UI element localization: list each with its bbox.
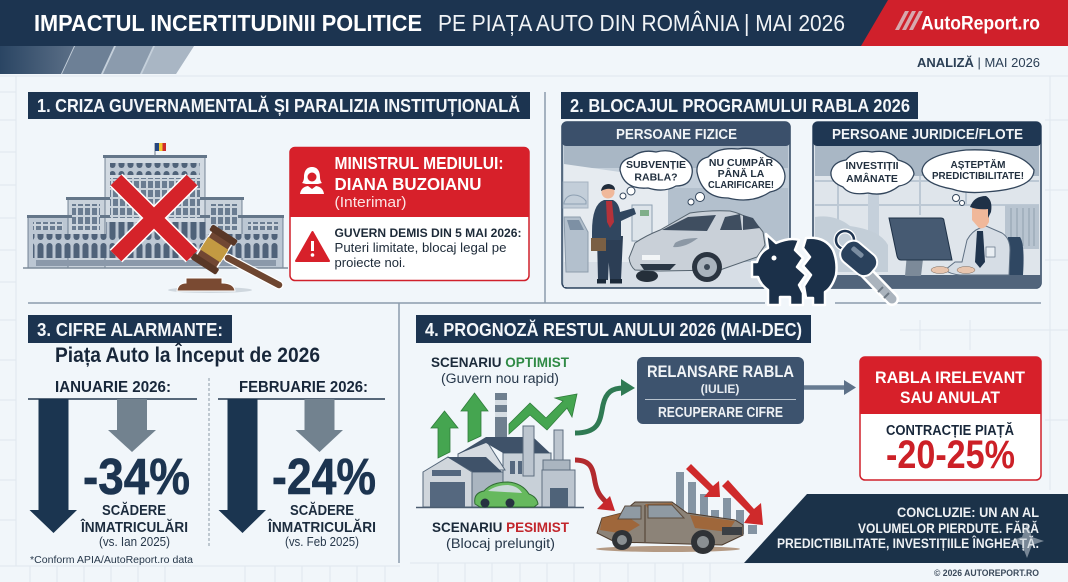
footer copyright: © 2026 AUTOREPORT.RO (934, 568, 1039, 579)
caption: SCĂDERE (102, 502, 166, 519)
source note: *Conform APIA/AutoReport.ro data (30, 555, 193, 566)
caption (267, 502, 376, 549)
subtitle: Piața Auto la Început de 2026 (55, 343, 320, 367)
card heading: (Interimar) (334, 194, 407, 211)
box: relansare rabla: RELANSARE RABLA (647, 363, 794, 381)
heading 4 (416, 315, 811, 343)
icon: desk (813, 275, 1041, 288)
thought bubble: asteptam: PREDICTIBILITATE! (932, 171, 1024, 182)
thought bubble: nu cumpar: NU CUMPĂR (709, 156, 773, 169)
thought bubble: investitii: AMÂNATE (846, 172, 898, 185)
panel 3: cifre alarmante (28, 315, 385, 566)
logo block: AutoReport.ro (921, 14, 1040, 34)
caption: (vs. Feb 2025) (285, 535, 359, 549)
card body text: proiecte noi. (334, 256, 406, 270)
heading 1: 1. CRIZA GUVERNAMENTALĂ ȘI PARALIZIA INSTITUȚIONALĂ (37, 95, 520, 116)
header stripes (0, 46, 194, 74)
panel 2: blocajul rabla (561, 92, 1041, 305)
conclusion banner: VOLUMELOR PIERDUTE. FĂRĂ (858, 521, 1039, 536)
arrow: red curve (575, 460, 615, 511)
thought bubble: nu cumpar: PÂNĂ LA (718, 167, 765, 180)
icon: customer (591, 184, 636, 284)
card heading: MINISTRUL MEDIULUI: (334, 153, 504, 173)
icon: factory (416, 393, 584, 508)
header bar (0, 0, 1068, 46)
card body text (334, 226, 522, 270)
chart: falling bars (676, 464, 763, 534)
arrow: long down (30, 399, 77, 533)
scene: persoane fizice: PERSOANE FIZICE (616, 127, 737, 143)
card heading (334, 153, 504, 211)
heading 3: 3. CIFRE ALARMANTE: (37, 319, 223, 340)
title: IMPACTUL INCERTITUDINII POLITICE (34, 10, 422, 36)
icon: warning (296, 232, 329, 261)
box: relansare rabla: RECUPERARE CIFRE (658, 405, 783, 421)
arrow: short down (108, 399, 156, 452)
box: rabla irelevant: RABLA IRELEVANT (875, 368, 1026, 387)
label: scenariu pesimist (432, 519, 569, 551)
thought bubble: nu cumpar: CLARIFICARE! (708, 179, 774, 191)
thought bubble: subventie: RABLA? (634, 172, 678, 184)
box: relansare rabla: (IULIE) (701, 382, 739, 396)
thought bubble: asteptam (922, 150, 1034, 206)
heading 3 (28, 315, 232, 343)
label: scenariu pesimist: SCENARIU PESIMIST (432, 519, 569, 535)
scene: persoane juridice (813, 122, 1041, 288)
icon: red X (116, 180, 192, 256)
card heading: DIANA BUZOIANU (334, 174, 482, 194)
arrow: to outcome (804, 380, 856, 395)
box: rabla irelevant: CONTRACȚIE PIAȚĂ (886, 422, 1014, 439)
icon: car (629, 211, 765, 282)
logo block (861, 0, 1068, 46)
panel 1: criza guvernamentala (23, 92, 530, 293)
label: scenariu pesimist: (Blocaj prelungit) (446, 536, 555, 551)
kiosk (564, 217, 588, 272)
arrow: short down (296, 399, 343, 452)
icon: monitor (889, 218, 952, 276)
date label: ANALIZĂ | MAI 2026 (917, 55, 1040, 70)
label: scenariu optimist (431, 354, 569, 386)
panel 4: prognoza (416, 315, 1068, 579)
conclusion banner: CONCLUZIE: UN AN AL (897, 505, 1039, 520)
icon: broken piggy bank (752, 234, 837, 305)
heading 4: 4. PROGNOZĂ RESTUL ANULUI 2026 (MAI-DEC) (425, 319, 802, 340)
caption: (vs. Ian 2025) (99, 535, 170, 549)
label: scenariu optimist: SCENARIU OPTIMIST (431, 354, 569, 370)
conclusion banner (744, 494, 1068, 563)
caption (80, 502, 188, 549)
thought bubble: investitii: INVESTIȚII (845, 160, 899, 172)
thought bubble: investitii (831, 151, 914, 194)
column: ianuarie: IANUARIE 2026: (55, 379, 171, 396)
icon: flag (155, 143, 166, 156)
arrow: green curve (575, 379, 635, 433)
title: PE PIAȚA AUTO DIN ROMÂNIA | MAI 2026 (438, 10, 845, 36)
icon: analyst (931, 196, 1024, 275)
icon: car key (836, 231, 892, 299)
scene: persoane fizice (562, 122, 790, 288)
card: ministru (290, 148, 529, 280)
arrow: long down (218, 399, 266, 533)
caption: ÎNMATRICULĂRI (267, 518, 376, 536)
column: februarie: FEBRUARIE 2026: (239, 379, 368, 396)
box: relansare rabla (637, 357, 804, 424)
heading 2: 2. BLOCAJUL PROGRAMULUI RABLA 2026 (570, 95, 910, 116)
thought bubble: nu cumpar (688, 148, 785, 205)
card body text: Puteri limitate, blocaj legal pe (334, 241, 507, 255)
column: ianuarie (28, 379, 197, 549)
value: -24% (272, 448, 376, 505)
shelf (1005, 205, 1039, 249)
column: februarie (218, 379, 385, 549)
arrows: falling (686, 464, 763, 525)
scene: persoane juridice: PERSOANE JURIDICE/FLOTE (832, 127, 1023, 143)
charger (632, 205, 652, 241)
box: rabla irelevant: -20-25% (886, 433, 1015, 477)
box: rabla irelevant: SAU ANULAT (900, 388, 1001, 407)
caption: SCĂDERE (290, 502, 354, 519)
icon: green car (475, 482, 538, 508)
thought bubble: subventie: SUBVENȚIE (626, 159, 686, 171)
wall poster (563, 182, 588, 208)
caption: ÎNMATRICULĂRI (80, 518, 188, 536)
label: scenariu optimist: (Guvern nou rapid) (441, 371, 559, 386)
icon: gavel (168, 224, 279, 293)
icon: green arrows (431, 393, 577, 458)
icon: rusty car (596, 502, 743, 554)
box: rabla irelevant (860, 357, 1041, 480)
conclusion banner: PREDICTIBILITATE, INVESTIȚIILE ÎNGHEAȚĂ. (777, 536, 1039, 551)
card body text: GUVERN DEMIS DIN 5 MAI 2026: (334, 226, 522, 240)
icon: person (300, 167, 324, 194)
value: -34% (83, 448, 190, 505)
icon: parliament palace (23, 143, 288, 268)
thought bubble: asteptam: AȘTEPTĂM (950, 158, 1006, 171)
thought bubble: subventie (620, 151, 692, 199)
